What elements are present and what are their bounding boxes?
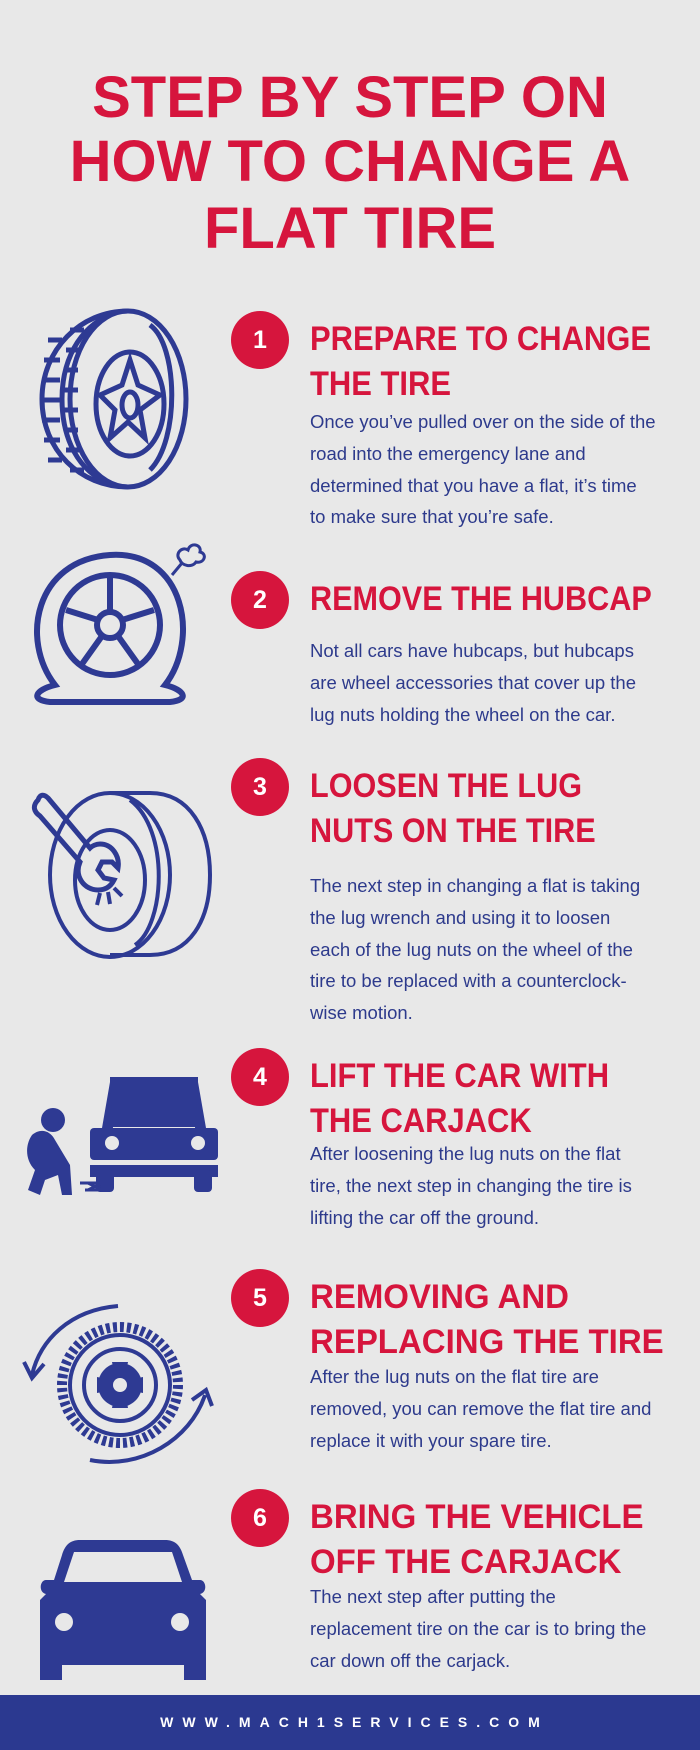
icon: person with carjack and car bbox=[27, 1077, 218, 1195]
text 1: road into the emergency lane and bbox=[310, 443, 586, 464]
heading 1: PREPARE TO CHANGE bbox=[310, 320, 651, 358]
text 6: The next step after putting the bbox=[310, 1586, 556, 1607]
heading 6: BRING THE VEHICLE bbox=[310, 1498, 643, 1536]
heading 1: THE TIRE bbox=[310, 365, 451, 403]
number 6: 6 bbox=[253, 1504, 267, 1532]
heading 3: NUTS ON THE TIRE bbox=[310, 812, 596, 850]
step 1 panel bbox=[40, 308, 656, 527]
text 5 bbox=[310, 1366, 651, 1451]
text 1: Once you’ve pulled over on the side of the bbox=[310, 411, 656, 432]
icon: flat tire bbox=[34, 543, 206, 705]
step 4 panel bbox=[27, 1048, 632, 1228]
step 3 panel bbox=[32, 758, 640, 1023]
heading 4: THE CARJACK bbox=[310, 1102, 532, 1140]
heading 5 bbox=[310, 1278, 664, 1361]
heading 5: REPLACING THE TIRE bbox=[310, 1323, 664, 1361]
text 6: car down off the carjack. bbox=[310, 1650, 510, 1671]
text 4 bbox=[310, 1143, 632, 1228]
number 2: 2 bbox=[253, 586, 267, 614]
number 1: 1 bbox=[253, 326, 267, 354]
heading 2: REMOVE THE HUBCAP bbox=[310, 580, 652, 618]
title: HOW TO CHANGE A bbox=[70, 129, 630, 194]
text 2: are wheel accessories that cover up the bbox=[310, 672, 636, 693]
text 4: tire, the next step in changing the tire is bbox=[310, 1175, 632, 1196]
number 1 bbox=[231, 311, 289, 369]
heading 6: OFF THE CARJACK bbox=[310, 1543, 621, 1581]
heading 5: REMOVING AND bbox=[310, 1278, 569, 1316]
text 2 bbox=[310, 640, 636, 725]
text 5: replace it with your spare tire. bbox=[310, 1430, 552, 1451]
step 2 panel bbox=[34, 543, 652, 725]
text 3: each of the lug nuts on the wheel of the bbox=[310, 939, 633, 960]
text 1: to make sure that you’re safe. bbox=[310, 506, 554, 527]
number 4 bbox=[231, 1048, 289, 1106]
heading 3 bbox=[310, 767, 596, 850]
text 2: Not all cars have hubcaps, but hubcaps bbox=[310, 640, 634, 661]
step 6 panel bbox=[40, 1489, 646, 1680]
number 4: 4 bbox=[253, 1063, 267, 1091]
footer: WWW.MACH1SERVICES.COM bbox=[160, 1714, 549, 1730]
icon: rotating tire bbox=[22, 1304, 214, 1464]
title: STEP BY STEP ON bbox=[92, 65, 608, 130]
text 2: lug nuts holding the wheel on the car. bbox=[310, 704, 615, 725]
text 5: After the lug nuts on the flat tire are bbox=[310, 1366, 599, 1387]
heading 1 bbox=[310, 320, 651, 403]
number 6 bbox=[231, 1489, 289, 1547]
heading 4 bbox=[310, 1057, 609, 1140]
text 5: removed, you can remove the flat tire and bbox=[310, 1398, 651, 1419]
text 3: the lug wrench and using it to loosen bbox=[310, 907, 610, 928]
title bbox=[70, 65, 630, 261]
footer bbox=[0, 1695, 700, 1750]
text 4: After loosening the lug nuts on the flat bbox=[310, 1143, 621, 1164]
icon: car front bbox=[40, 1540, 206, 1680]
text 4: lifting the car off the ground. bbox=[310, 1207, 539, 1228]
title: FLAT TIRE bbox=[204, 196, 496, 261]
number 3 bbox=[231, 758, 289, 816]
text 6: replacement tire on the car is to bring the bbox=[310, 1618, 646, 1639]
number 3: 3 bbox=[253, 773, 267, 801]
text 3: wise motion. bbox=[310, 1002, 413, 1023]
step 5 panel bbox=[22, 1269, 664, 1464]
icon: wrench on tire bbox=[32, 791, 212, 959]
number 2 bbox=[231, 571, 289, 629]
heading 4: LIFT THE CAR WITH bbox=[310, 1057, 609, 1095]
text 6 bbox=[310, 1586, 646, 1671]
text 1 bbox=[310, 411, 656, 527]
heading 3: LOOSEN THE LUG bbox=[310, 767, 582, 805]
number 5 bbox=[231, 1269, 289, 1327]
text 3: tire to be replaced with a counterclock- bbox=[310, 970, 627, 991]
text 1: determined that you have a flat, it’s time bbox=[310, 475, 637, 496]
text 3 bbox=[310, 875, 640, 1023]
icon: tire bbox=[40, 308, 188, 490]
text 3: The next step in changing a flat is taking bbox=[310, 875, 640, 896]
number 5: 5 bbox=[253, 1284, 267, 1312]
heading 6 bbox=[310, 1498, 643, 1581]
